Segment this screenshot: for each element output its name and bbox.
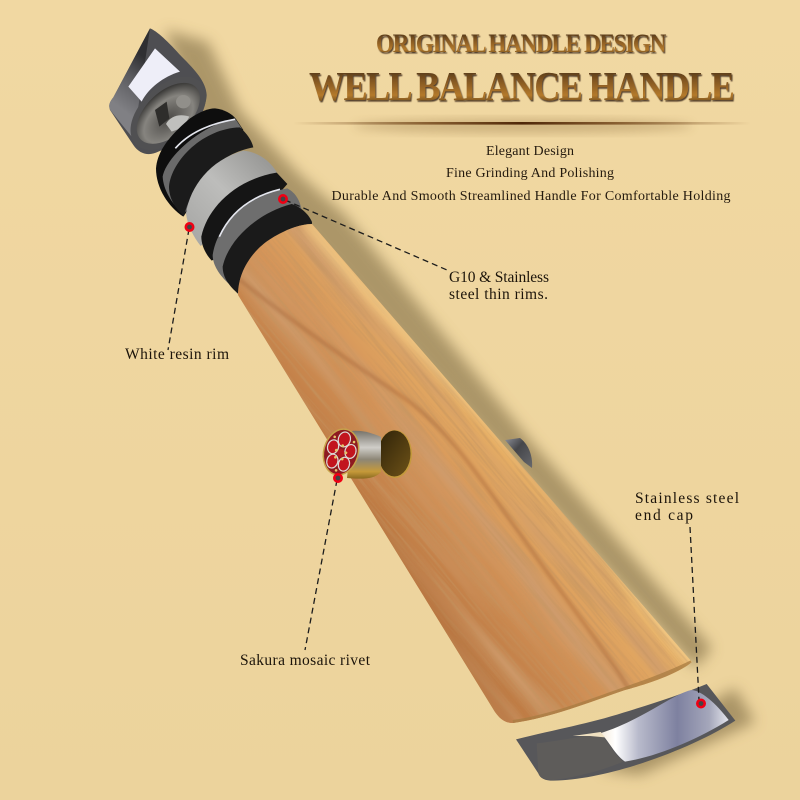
label: G10 and stainless steel thin rims: G10 & Stainless bbox=[449, 269, 549, 286]
wooden handle bbox=[238, 224, 692, 723]
rivet stub behind handle bbox=[505, 438, 532, 468]
marker: white resin rim bbox=[186, 223, 193, 231]
drop shadows of handle parts bbox=[165, 30, 755, 775]
heading: well balance handle: WELL BALANCE HANDLE bbox=[309, 63, 734, 109]
ring: steel rim bbox=[213, 188, 302, 283]
heading divider bbox=[293, 119, 751, 133]
description text bbox=[332, 144, 730, 204]
label: stainless steel end cap: Stainless steel bbox=[635, 490, 739, 507]
label: G10 and stainless steel thin rims bbox=[449, 269, 549, 303]
rivet cylinder bbox=[347, 431, 381, 479]
ring: steel rim bbox=[163, 118, 242, 215]
heading: original handle design: ORIGINAL HANDLE DESIGN bbox=[376, 29, 667, 58]
handle collar rings and top cap bbox=[109, 28, 312, 294]
ring: black G10 spacer bbox=[156, 108, 243, 217]
marker: G10 and stainless rims bbox=[279, 195, 287, 203]
icon: sakura mosaic rivet face bbox=[317, 424, 365, 480]
marker: sakura rivet bbox=[334, 474, 342, 482]
wood grain texture bbox=[238, 224, 688, 723]
ring: white resin rim bbox=[186, 151, 277, 246]
label: stainless steel end cap: end cap bbox=[635, 507, 693, 524]
label: G10 and stainless steel thin rims: steel thin rims. bbox=[449, 286, 548, 303]
description text: Durable And Smooth Streamlined Handle For Comfortable Holding bbox=[332, 189, 730, 204]
stainless steel end cap bbox=[516, 684, 735, 781]
rivet hole bbox=[378, 430, 412, 478]
label: sakura mosaic rivet: Sakura mosaic rivet bbox=[240, 652, 371, 669]
wood grain streaks bbox=[240, 225, 700, 740]
handle end bevel bbox=[513, 663, 692, 723]
ring: black spacer bbox=[223, 204, 312, 294]
icon: steel top cap bbox=[109, 28, 220, 164]
marker: end cap bbox=[697, 700, 705, 707]
description text: Elegant Design bbox=[486, 144, 574, 159]
label: white resin rim: White resin rim bbox=[125, 346, 229, 363]
description text: Fine Grinding And Polishing bbox=[446, 166, 614, 181]
dashed leader lines bbox=[168, 200, 699, 700]
label: stainless steel end cap bbox=[635, 490, 739, 524]
ring: black spacer bbox=[169, 127, 253, 216]
ring: black spacer bbox=[201, 173, 287, 261]
